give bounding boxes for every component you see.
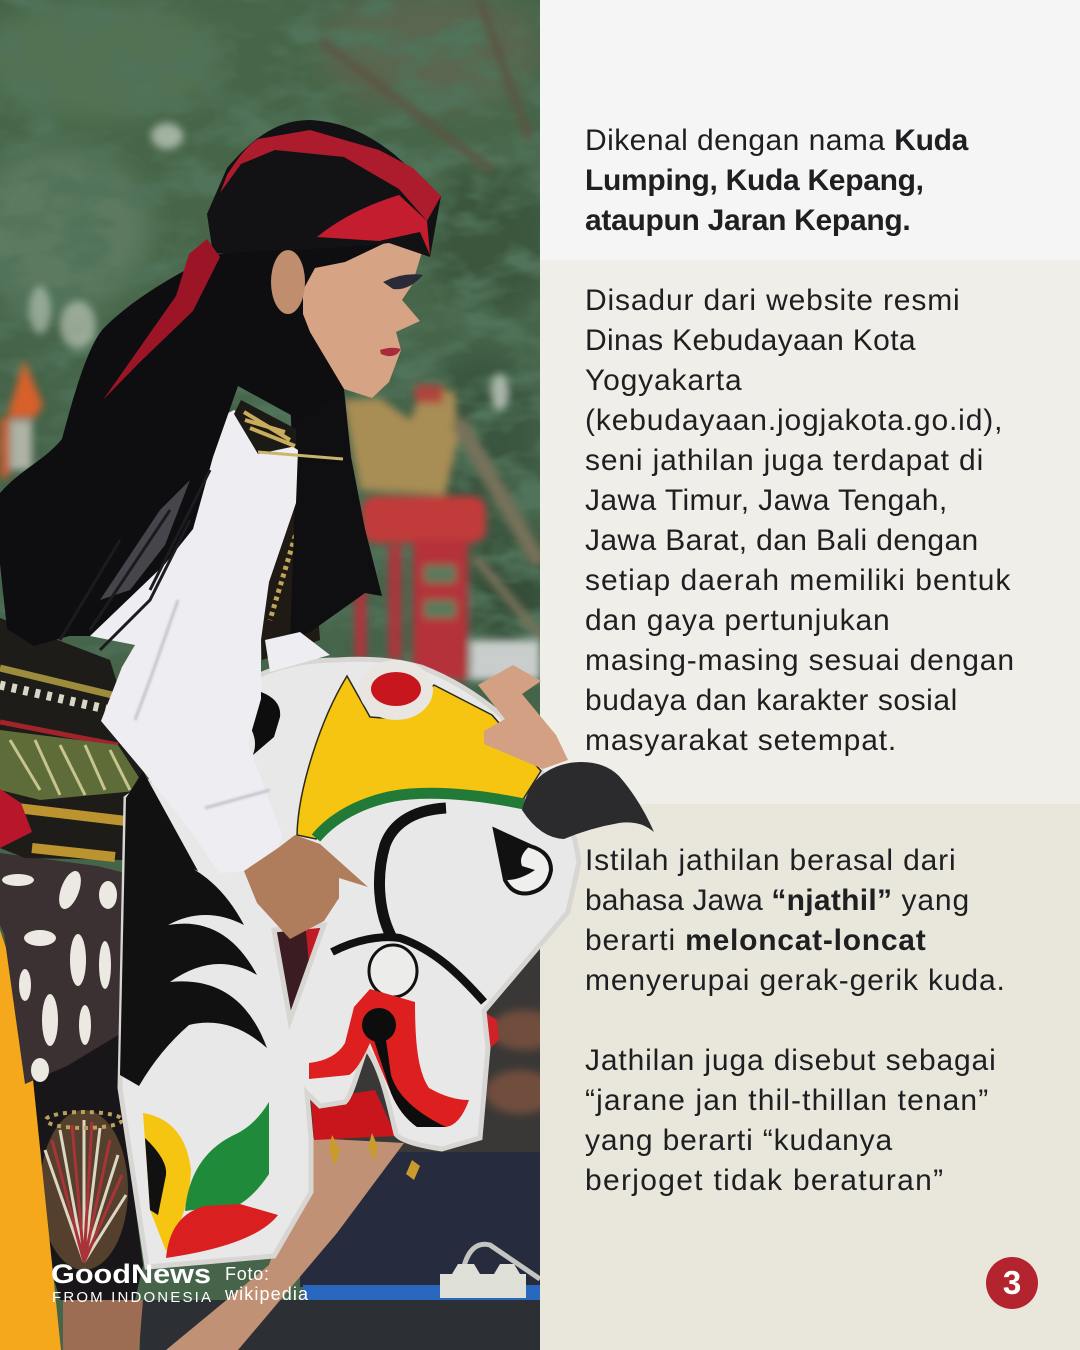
page number badge: 3 <box>1003 1264 1021 1301</box>
text block: origin of the word jathilan <box>585 844 1006 997</box>
black head cloth <box>207 120 441 257</box>
horse mark near sleeve <box>231 692 280 755</box>
red band on head cloth <box>220 130 441 221</box>
gold tassels <box>329 1133 420 1180</box>
text block: names of the dance: Lumping, Kuda Kepang, <box>585 164 924 197</box>
logo: GoodNews from Indonesia <box>51 1259 211 1306</box>
back hair lower right <box>290 300 382 640</box>
red skirt under horse <box>311 1090 396 1140</box>
page number badge <box>986 1257 1038 1309</box>
panel: middle text background <box>540 260 1080 804</box>
photo: dancer with woven horse <box>0 0 654 1350</box>
horse nostril <box>362 1008 446 1127</box>
horse mane <box>120 771 267 1086</box>
text block: alternative meaning: Jathilan juga disebut sebagai <box>585 1044 997 1077</box>
face <box>303 238 422 398</box>
red sash <box>0 789 32 848</box>
hair at temple <box>300 243 385 290</box>
eye makeup <box>383 274 423 289</box>
text block: source and regions: Yogyakarta <box>585 364 743 397</box>
horse crown jewel <box>359 660 433 720</box>
text block: source and regions: setiap daerah memiliki bentuk <box>585 564 1011 597</box>
red fold on head cloth <box>317 195 430 255</box>
right leg <box>166 1138 404 1350</box>
text block: source and regions: Disadur dari website resmi <box>585 284 961 317</box>
text block: origin of the word jathilan: menyerupai gerak-gerik kuda. <box>585 964 1006 997</box>
horse prop <box>120 659 654 1267</box>
horse black ear <box>522 762 654 839</box>
batik skirt <box>0 853 133 1084</box>
text block: names of the dance <box>585 124 968 237</box>
text block: source and regions: masing-masing sesuai dengan <box>585 644 1015 677</box>
blue strip <box>303 1285 540 1300</box>
horse tail red <box>166 1204 278 1258</box>
horse white body and head <box>120 659 579 1267</box>
floor <box>140 1300 540 1350</box>
text block: names of the dance: ataupun Jaran Kepang. <box>585 204 910 237</box>
text block: source and regions: budaya dan karakter sosial <box>585 684 958 717</box>
text block: source and regions <box>585 284 1015 757</box>
panel: bottom text background <box>540 804 1080 1350</box>
dark tarp <box>300 1152 540 1287</box>
text block: alternative meaning: berjoget tidak beraturan” <box>585 1164 944 1197</box>
beaded ornament <box>40 1110 128 1270</box>
horse tail green <box>185 1102 269 1211</box>
photo credit <box>224 1264 309 1304</box>
trunks <box>458 421 540 564</box>
main hair <box>0 240 380 650</box>
white shirt <box>5 410 330 873</box>
text block: alternative meaning: yang berarti “kudanya <box>585 1124 893 1157</box>
photo background <box>0 0 560 1350</box>
gold ornament <box>343 385 458 495</box>
pale background spots <box>151 123 183 149</box>
horse eye <box>495 830 551 893</box>
red tail of head cloth <box>103 239 220 400</box>
epaulette <box>234 400 343 459</box>
horse yellow crown <box>297 676 541 839</box>
yellow costume <box>0 930 61 1350</box>
text block: source and regions: dan gaya pertunjukan <box>585 604 891 637</box>
horse green band <box>316 793 524 838</box>
dark trousers <box>0 1030 143 1300</box>
logo: GoodNews from Indonesia: FROM INDONESIA <box>52 1289 211 1306</box>
dark vest <box>255 500 320 660</box>
foliage texture <box>0 0 540 680</box>
text block: source and regions: Jawa Timur, Jawa Tengah, <box>585 484 948 517</box>
vest gold beads <box>270 520 300 620</box>
gap behind horse <box>270 915 330 1030</box>
text block: alternative meaning <box>585 1044 997 1197</box>
upper hand <box>478 665 568 769</box>
text block: origin of the word jathilan: Istilah jathilan berasal dari <box>585 844 957 877</box>
text block: source and regions: (kebudayaan.jogjakota.go.id), <box>585 404 1003 437</box>
blurred spectators <box>486 1006 540 1118</box>
dark area behind horse <box>310 949 540 1152</box>
orange gate <box>7 360 43 418</box>
lips <box>380 348 401 356</box>
text block: source and regions: Jawa Barat, dan Bali dengan <box>585 524 979 557</box>
text block: source and regions: seni jathilan juga terdapat di <box>585 444 984 477</box>
text block: alternative meaning: “jarane jan thil-thillan tenan” <box>585 1084 989 1117</box>
red cloth right of horse <box>484 1012 499 1050</box>
left leg <box>63 1300 143 1350</box>
text block: origin of the word jathilan: bahasa Jawa “njathil” yang <box>585 884 970 917</box>
photo credit: Foto: <box>225 1264 269 1284</box>
lower hand <box>244 835 368 939</box>
ear <box>271 250 305 314</box>
text block: names of the dance: Dikenal dengan nama Kuda <box>585 124 968 157</box>
horse tail black <box>145 1138 166 1215</box>
text block: origin of the word jathilan: berarti meloncat-loncat <box>585 924 926 957</box>
photo credit: wikipedia <box>224 1284 309 1304</box>
horse tail yellow <box>143 1113 191 1251</box>
plug socket <box>440 1264 526 1298</box>
red rail <box>362 496 486 543</box>
horse red mouth <box>309 989 469 1127</box>
power cable <box>463 1244 540 1279</box>
panel: top text background <box>540 0 1080 260</box>
horse face line <box>379 808 446 936</box>
horse muzzle circle <box>369 945 417 997</box>
text block: source and regions: masyarakat setempat. <box>585 724 897 757</box>
logo: GoodNews from Indonesia: GoodNews <box>51 1259 211 1289</box>
ornate waist belt <box>0 618 150 860</box>
horse brow arch <box>332 937 484 1002</box>
text block: source and regions: Dinas Kebudayaan Kota <box>585 324 916 357</box>
